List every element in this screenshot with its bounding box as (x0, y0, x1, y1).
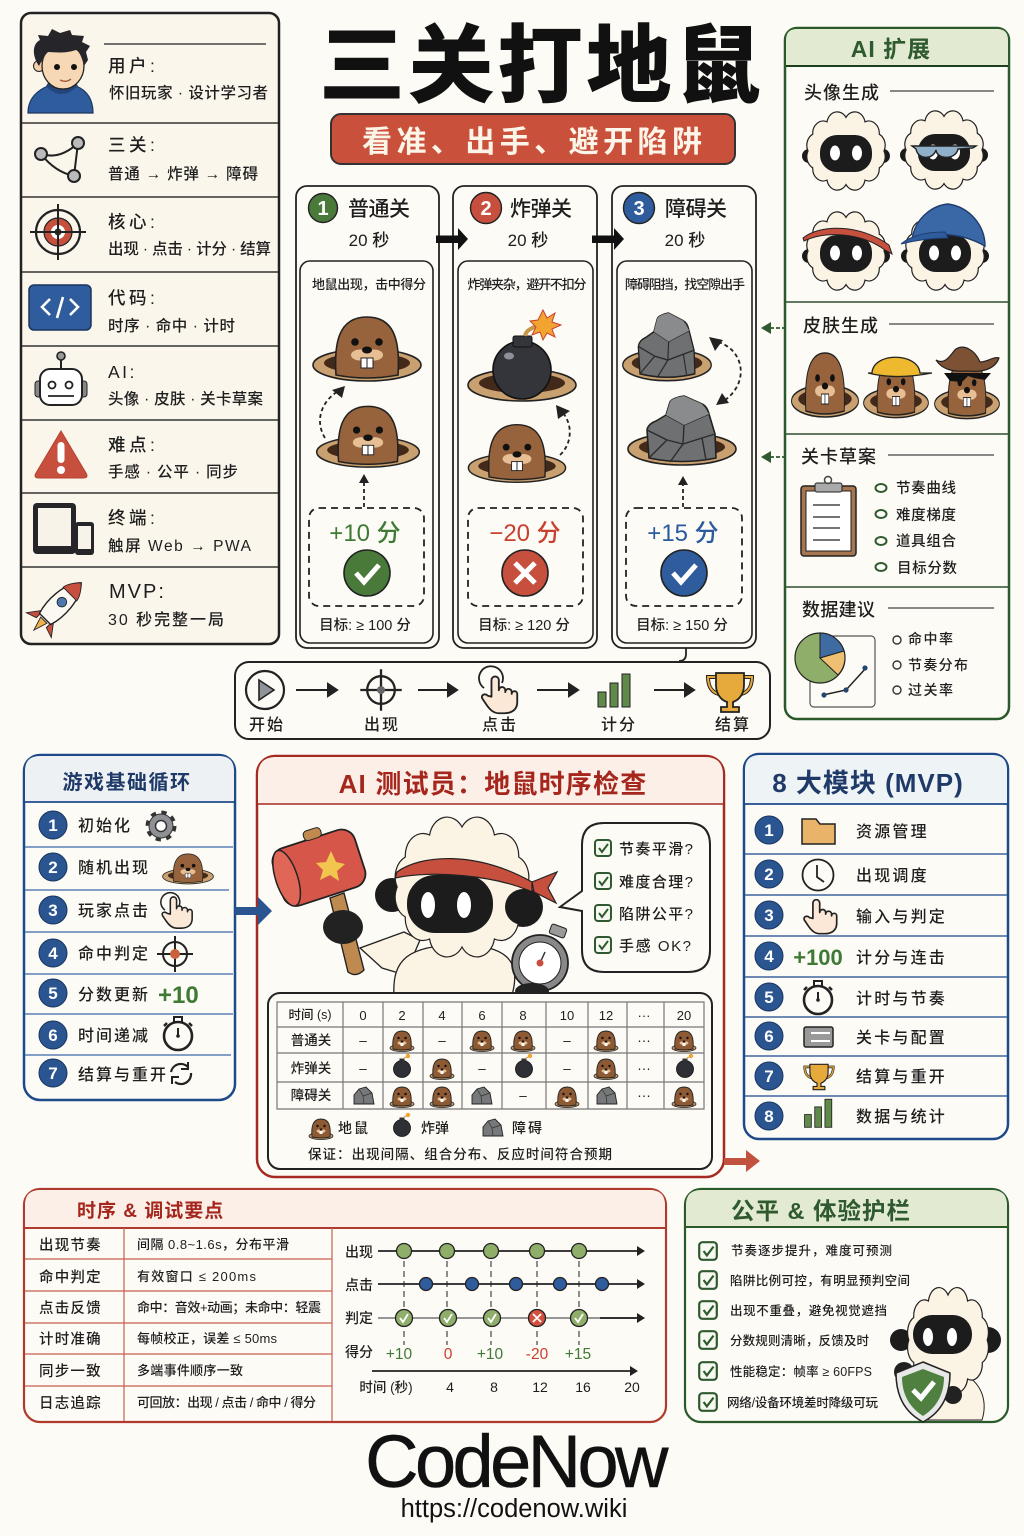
timeline chart: 时间 (秒) (359, 1380, 413, 1395)
checklist: 难度梯度 (896, 507, 956, 524)
module 2: 2 (764, 865, 774, 884)
timeline chart: 点击 (345, 1277, 373, 1293)
module 3: 输入与判定 (856, 907, 947, 926)
connector to flow (679, 648, 686, 661)
table text: 0 (359, 1008, 367, 1023)
step 4: 4 (48, 944, 58, 963)
table text: 8 (519, 1008, 527, 1023)
module 1 (755, 816, 929, 844)
icon: red hammer (264, 817, 369, 975)
icon: three-node graph (35, 137, 84, 182)
header: 8 大模块 (MVP) (772, 768, 964, 798)
arrow (654, 684, 694, 696)
checklist table: 日志追踪 (39, 1395, 102, 1412)
step 6 (39, 1017, 192, 1050)
module 6: 关卡与配置 (856, 1029, 947, 1047)
icon: score bars (598, 674, 630, 707)
table text: ··· (638, 1008, 650, 1023)
checklist table: 有效窗口 ≤ 200ms (137, 1269, 256, 1284)
panel: AI tester (257, 756, 724, 1177)
guardrail list: 分数规则清晰，反馈及时 (730, 1333, 869, 1348)
heading: 头像生成 (804, 83, 879, 103)
text: devices: 触屏 Web → PWA (108, 537, 252, 555)
rock lower (628, 396, 736, 465)
module 6 (755, 1022, 947, 1050)
up arrow (678, 476, 688, 507)
label: tap: 点击 (482, 716, 518, 734)
module 7 (755, 1062, 947, 1090)
icon: refresh (171, 1062, 191, 1084)
module 5 (755, 981, 947, 1014)
avatar sunglasses (900, 111, 988, 189)
step 1: 1 (48, 816, 58, 835)
url: https://codenow.wiki (401, 1495, 627, 1523)
step 5: 5 (48, 984, 58, 1003)
text: difficulty: 手感 · 公平 · 同步 (108, 463, 238, 481)
dashed arrow (556, 405, 570, 455)
icon: user avatar (28, 29, 93, 113)
text: difficulty (108, 435, 238, 481)
mole hard hat (864, 357, 932, 418)
heading: 炸弹关 (510, 198, 572, 221)
metric list (893, 631, 968, 698)
guarantee note: 保证：出现间隔、组合分布、反应时间符合预期 (308, 1146, 612, 1162)
icon: hand (161, 893, 192, 928)
header: 公平 & 体验护栏 (731, 1197, 911, 1224)
text: user: 用户: (108, 56, 158, 76)
step 7 (39, 1059, 191, 1087)
subtitle banner: 看准、出手、避开陷阱 (362, 126, 702, 159)
timeline chart: 16 (575, 1379, 591, 1395)
step 2 (39, 853, 213, 884)
step 1 (39, 811, 174, 839)
step 6: 时间递减 (78, 1026, 150, 1045)
icon: rocket (21, 570, 94, 643)
row: bomb (394, 1054, 694, 1080)
icon: code block (29, 285, 91, 330)
header: 时序 & 调试要点 (77, 1199, 224, 1222)
arrow: level 2 to level 3 (592, 228, 624, 250)
mole plain (792, 353, 858, 417)
step 4 (39, 936, 193, 972)
arrow: draft to level (761, 451, 784, 463)
panel: level 1 normal (296, 186, 439, 648)
arrow: loop to tester (235, 897, 272, 925)
module 4: 4 (764, 947, 774, 966)
module 2 (755, 860, 929, 890)
inner card (458, 261, 593, 643)
timeline chart: 8 (490, 1379, 498, 1395)
step 3: 玩家点击 (78, 901, 150, 920)
checklist table: 命中判定 (39, 1268, 102, 1286)
text: AI (108, 362, 263, 408)
text: code: 代码: (108, 288, 158, 308)
section: data (795, 600, 994, 707)
icon: clipboard (801, 476, 856, 556)
icon: pie and line chart (795, 633, 875, 707)
timeline chart: 12 (532, 1379, 548, 1395)
badge 2 (470, 192, 502, 224)
arrow: skin to level (761, 322, 784, 334)
target score: 目标: ≥ 150 分 (636, 617, 728, 634)
target score: 目标: ≥ 120 分 (478, 617, 570, 634)
icon: robot (35, 352, 87, 405)
step 3 (39, 893, 192, 928)
table text: 障碍关 (291, 1087, 332, 1103)
label: start: 开始 (249, 716, 285, 734)
header: AI 测试员：地鼠时序检查 (339, 769, 647, 799)
header (25, 756, 234, 802)
badge 3: 3 (633, 198, 645, 220)
icon: tablet and phone (33, 503, 94, 555)
icon: mole (163, 854, 213, 884)
step 1: 初始化 (78, 817, 132, 835)
table text: – (438, 1033, 446, 1048)
text: user: 怀旧玩家 · 设计学习者 (109, 83, 268, 102)
callout: check bubble (560, 823, 710, 972)
panel: play flow (235, 662, 770, 739)
avatar plain (802, 112, 890, 190)
label: appear: 出现 (364, 716, 400, 734)
guardrail list: 出现不重叠，避免视觉遮挡 (730, 1303, 887, 1318)
mole top (313, 317, 421, 381)
arrow (296, 684, 337, 696)
step 5: 分数更新 (78, 986, 150, 1004)
icon: play (246, 671, 284, 709)
badge 3 (624, 192, 654, 224)
legend: 障碍 (512, 1120, 542, 1136)
bomb in hole (468, 310, 576, 401)
header (786, 29, 1008, 66)
timeline chart: +10 (386, 1346, 413, 1363)
legend (309, 1113, 542, 1140)
illustration: sheep tester with hammer (360, 817, 557, 995)
badge 1: 1 (317, 198, 329, 220)
checklist table: 命中：音效+动画；未命中：轻震 (137, 1300, 321, 1316)
icon: target (157, 936, 193, 972)
header (25, 1190, 665, 1228)
row: normal (390, 1031, 696, 1052)
label: result: 结算 (715, 715, 751, 734)
icon: trophy (708, 673, 752, 712)
callout: check bubble: 难度合理? (619, 874, 693, 891)
header: 游戏基础循环 (62, 770, 192, 794)
panel: level 2 bomb (453, 186, 597, 648)
checklist table: 每帧校正，误差 ≤ 50ms (137, 1331, 278, 1346)
icon: warning triangle (35, 431, 87, 478)
table text: ··· (637, 1088, 651, 1103)
module 8: 8 (764, 1107, 774, 1126)
callout: check bubble: 陷阱公平? (619, 906, 693, 923)
step 7: 结算与重开 (78, 1065, 168, 1084)
table text: 2 (398, 1008, 406, 1023)
description: 障碍阻挡，找空隙出手 (625, 277, 745, 292)
table text (288, 1008, 691, 1103)
up arrow (359, 474, 369, 507)
dashed arrow (320, 386, 345, 438)
step 4: 命中判定 (78, 944, 150, 963)
timeline chart: +10 (477, 1346, 504, 1363)
callout: check bubble: 手感 OK? (619, 938, 691, 955)
header (686, 1190, 1007, 1227)
table text: 10 (560, 1008, 574, 1023)
metric list: 过关率 (908, 682, 953, 698)
module 5: 计时与节奏 (856, 990, 947, 1008)
text: core (108, 212, 271, 258)
avatar blue cap (901, 204, 989, 290)
inner card (300, 261, 433, 643)
score box: +10 分 (329, 520, 401, 547)
table text: ··· (637, 1033, 651, 1048)
icon: target (360, 669, 402, 711)
checklist table: 点击反馈 (39, 1300, 102, 1317)
guardrail list: 陷阱比例可控，有明显预判空间 (730, 1273, 910, 1288)
panel: basic game loop (24, 755, 235, 1100)
text: core: 出现 · 点击 · 计分 · 结算 (108, 239, 271, 258)
table text: 12 (599, 1008, 613, 1023)
illustration: sheep with shield (890, 1288, 1001, 1422)
panel: fairness guardrails (685, 1189, 1008, 1422)
icon: gear (148, 813, 174, 839)
checklist: 节奏曲线 (896, 480, 956, 497)
table text: – (359, 1033, 367, 1048)
checklist table (25, 1228, 332, 1421)
text: MVP: 30 秒完整一局 (108, 610, 224, 629)
table text: – (519, 1088, 527, 1103)
text: AI: 头像 · 皮肤 · 关卡草案 (108, 389, 263, 408)
heading: 普通关 (348, 198, 410, 221)
score: +10 (158, 982, 199, 1009)
score box: +15 分 (647, 520, 719, 547)
step 6: 6 (48, 1026, 58, 1045)
icon: stopwatch (164, 1017, 192, 1050)
module 1: 1 (764, 821, 774, 840)
table text: 炸弹关 (291, 1061, 332, 1076)
score box (626, 508, 742, 606)
heading: 皮肤生成 (803, 316, 878, 336)
header (258, 757, 723, 804)
logo: CodeNow: CodeNow (365, 1420, 669, 1503)
icon: stopwatch (512, 924, 568, 999)
step 2: 随机出现 (78, 859, 150, 877)
inner card (617, 261, 752, 643)
step 2: 2 (48, 858, 58, 877)
timeline chart: 4 (446, 1379, 454, 1395)
table text: – (478, 1061, 486, 1076)
module 3: 3 (764, 906, 774, 925)
module 4: 计分与连击 (856, 949, 947, 967)
text: devices: 终端: (108, 508, 158, 528)
table text: – (563, 1033, 571, 1048)
badge 1 (308, 194, 338, 222)
avatar headband (802, 212, 892, 290)
mole lower (317, 406, 419, 467)
checklist table: 多端事件顺序一致 (137, 1363, 243, 1378)
dashed double arrow (709, 337, 741, 405)
guardrail list: 节奏逐步提升，难度可预测 (731, 1243, 892, 1258)
grid (277, 1002, 704, 1109)
mole lower (468, 425, 566, 482)
text: code: 时序 · 命中 · 计时 (108, 316, 235, 335)
text: AI: AI: (108, 362, 137, 382)
table text: ··· (637, 1061, 651, 1076)
module 5: 5 (764, 988, 774, 1007)
timeline chart: 判定 (345, 1310, 373, 1326)
text: core: 核心: (108, 212, 158, 232)
module 1: 资源管理 (856, 822, 929, 841)
row: obstacle (354, 1087, 696, 1108)
step 7: 7 (48, 1064, 58, 1083)
text: MVP (108, 581, 224, 629)
heading: 关卡草案 (801, 447, 876, 467)
duration: 20 秒 (508, 231, 548, 250)
badge 2: 2 (480, 198, 492, 220)
text: difficulty: 难点: (108, 435, 158, 455)
score box: −20 分 (489, 520, 561, 547)
guardrail list: 网络/设备环境差时降级可玩 (727, 1395, 878, 1410)
score box (468, 508, 583, 606)
text: MVP: MVP: (109, 581, 166, 603)
rock top (623, 313, 711, 381)
guardrail list (699, 1242, 910, 1411)
header (745, 755, 1007, 804)
arrow: level 1 to level 2 (436, 228, 468, 250)
guardrail list: 性能稳定：帧率 ≥ 60FPS (730, 1364, 872, 1379)
module 4 (755, 942, 947, 970)
score box (309, 508, 424, 606)
legend: 炸弹 (421, 1120, 449, 1136)
legend: 地鼠 (338, 1120, 368, 1136)
timeline chart: 20 (624, 1379, 640, 1395)
metric list: 节奏分布 (908, 657, 968, 673)
icon: target (30, 204, 86, 260)
table text: 6 (478, 1008, 486, 1023)
label: score: 计分 (601, 716, 637, 734)
step 3: 3 (48, 901, 58, 920)
metric list: 命中率 (908, 631, 953, 647)
module 8 (755, 1099, 947, 1130)
checklist: 目标分数 (897, 560, 958, 577)
section: level draft (801, 447, 994, 577)
module 2: 出现调度 (856, 866, 929, 885)
section: avatars (802, 83, 994, 290)
text: three levels (108, 135, 258, 183)
table text: 普通关 (291, 1033, 332, 1048)
checklist table: 计时准确 (39, 1331, 102, 1348)
callout: check bubble: 节奏平滑? (619, 841, 693, 858)
heading: 数据建议 (802, 600, 875, 620)
checklist (876, 480, 958, 577)
module 6: 6 (764, 1027, 774, 1046)
timeline chart: 得分 (345, 1344, 373, 1360)
header: AI 扩展 (851, 36, 931, 62)
timeline chart (345, 1244, 645, 1395)
table text: 20 (677, 1008, 691, 1023)
arrow (537, 684, 578, 696)
text: three levels: 普通 → 炸弹 → 障碍 (108, 165, 258, 183)
module 7: 7 (764, 1067, 774, 1086)
checklist table: 可回放：出现 / 点击 / 命中 / 得分 (137, 1395, 316, 1410)
checklist table: 间隔 0.8~1.6s，分布平滑 (137, 1237, 289, 1252)
heading: 障碍关 (665, 198, 727, 221)
duration: 20 秒 (665, 231, 705, 250)
timeline chart: -20 (526, 1346, 549, 1363)
table text: 4 (438, 1008, 446, 1023)
table text: – (359, 1061, 367, 1076)
module 7: 结算与重开 (856, 1067, 947, 1086)
checklist table: 出现节奏 (39, 1237, 102, 1254)
text: code (108, 288, 235, 335)
description: 地鼠出现，击中得分 (312, 277, 426, 292)
checklist table: 同步一致 (39, 1363, 102, 1380)
table text: 时间 (s) (288, 1008, 332, 1022)
panel: project profile (21, 13, 279, 644)
mole cowboy (935, 347, 999, 419)
arrow: tester to guardrail (724, 1150, 760, 1172)
target score: 目标: ≥ 100 分 (319, 617, 411, 634)
module 4: +100 (793, 945, 843, 970)
text: three levels: 三关: (108, 135, 158, 155)
module 3 (755, 900, 947, 934)
icon: hand (479, 666, 517, 713)
section: skins (792, 316, 999, 419)
timeline chart: +15 (565, 1346, 591, 1363)
text: devices (108, 508, 252, 555)
title: 三关打地鼠 (320, 19, 760, 113)
description: 炸弹夹杂，避开不扣分 (468, 277, 586, 292)
duration: 20 秒 (349, 231, 389, 250)
panel: AI expansion (785, 28, 1009, 719)
panel: timing and debug (24, 1189, 666, 1422)
checklist: 道具组合 (896, 532, 956, 550)
panel: 8 modules (744, 754, 1008, 1139)
timeline chart: 0 (444, 1346, 453, 1363)
panel: level 3 obstacle (612, 186, 756, 648)
subtitle banner (331, 114, 735, 164)
panel: timing table (268, 993, 712, 1169)
timeline chart: 出现 (345, 1244, 373, 1260)
arrow (418, 684, 457, 696)
module 8: 数据与统计 (856, 1108, 947, 1126)
step 5 (39, 979, 199, 1009)
text: user (108, 56, 268, 102)
table text: – (563, 1061, 571, 1076)
